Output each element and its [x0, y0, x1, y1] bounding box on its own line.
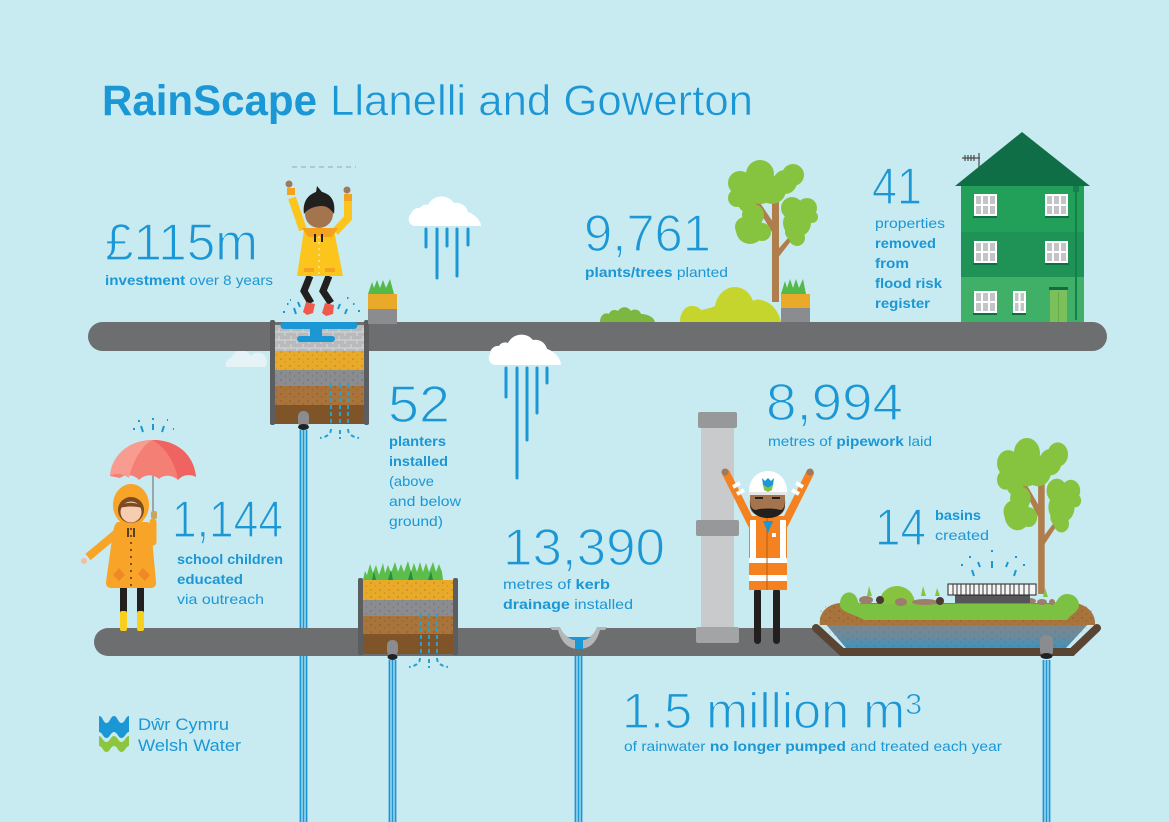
- logo: Dŵr Cymru Welsh Water: Welsh Water: [138, 736, 241, 755]
- small grass planter beside tree: [781, 279, 810, 322]
- stat: pipework: 8,994: [766, 374, 903, 432]
- stat: planters: (above: [389, 473, 434, 489]
- stat: planters: and below: [389, 493, 462, 509]
- stat: planters: [388, 376, 462, 529]
- icon: tree on upper road: [728, 160, 818, 302]
- stat: properties: removed: [875, 235, 936, 251]
- stat: plants and trees: [584, 205, 728, 280]
- logo: Dŵr Cymru Welsh Water: Dŵr Cymru: [138, 715, 229, 734]
- stat: rainwater: [622, 683, 1002, 754]
- stat: properties: flood risk: [875, 275, 942, 291]
- stat: planters: planters: [389, 433, 446, 449]
- stat: basins: created: [935, 527, 989, 543]
- cloud and rain: upper left: [409, 196, 481, 278]
- stat: properties: properties: [875, 215, 945, 231]
- stat: plants and trees: 9,761: [584, 205, 711, 263]
- stat: school children: 1,144: [172, 491, 283, 549]
- stat: properties: 41: [872, 158, 922, 216]
- icon: tree in basin: [997, 438, 1081, 594]
- icon: green house: [955, 132, 1090, 322]
- stat: school children: [172, 491, 283, 607]
- stat: properties: [872, 158, 945, 311]
- icon: bushes: [600, 287, 781, 322]
- planter: paved with layers and child's puddle: [270, 320, 369, 439]
- stat: planters: ground): [389, 513, 443, 529]
- stat: investment: investment over 8 years: [105, 272, 273, 288]
- stat: basins: 14: [875, 499, 926, 557]
- planter: grass with soil layers: [358, 561, 458, 668]
- small pale cloud behind road: [226, 350, 267, 367]
- logo: Dŵr Cymru Welsh Water: [99, 715, 241, 755]
- stat: school children: via outreach: [177, 591, 264, 607]
- stat: rainwater: of rainwater no longer pumped and treated each year: [624, 738, 1002, 754]
- stat: properties: from: [875, 255, 909, 271]
- stat: school children: educated: [177, 571, 243, 587]
- small grass planter on upper road: [368, 279, 397, 324]
- icon: worker in hi-vis with hard hat: [722, 468, 814, 644]
- stat: properties: register: [875, 295, 931, 311]
- road: upper: [88, 322, 1107, 351]
- icon: grassed basin with grate: [816, 550, 1097, 659]
- stat: kerb drainage: [503, 519, 665, 612]
- icon: child with umbrella: [81, 418, 196, 631]
- stat: planters: 52: [388, 376, 450, 434]
- icon: kerb drain channel: [550, 627, 607, 649]
- stat: basins: [875, 499, 989, 557]
- icon: vertical pipe with flanges: [696, 412, 739, 643]
- title: RainScape: [102, 77, 317, 125]
- title: [102, 77, 753, 125]
- stat: pipework: metres of pipework laid: [768, 433, 932, 449]
- stat: investment: £115m: [105, 214, 258, 272]
- cloud and rain: centre: [489, 335, 561, 478]
- stat: kerb drainage: metres of kerb: [503, 576, 610, 592]
- stat: pipework: [766, 374, 932, 449]
- title: Llanelli and Gowerton: [330, 77, 753, 125]
- stat: kerb drainage: 13,390: [503, 519, 665, 577]
- stat: basins: basins: [935, 507, 981, 523]
- stat: planters: installed: [389, 453, 448, 469]
- stat: plants and trees: plants/trees planted: [585, 264, 728, 280]
- icon: jumping child in yellow raincoat: [283, 167, 360, 316]
- road: lower: [94, 628, 842, 656]
- stat: school children: school children: [177, 551, 283, 567]
- stat: kerb drainage: drainage installed: [503, 596, 633, 612]
- underground water pipes: [300, 430, 1050, 822]
- stat: rainwater: 1.5 million m³: [622, 683, 922, 739]
